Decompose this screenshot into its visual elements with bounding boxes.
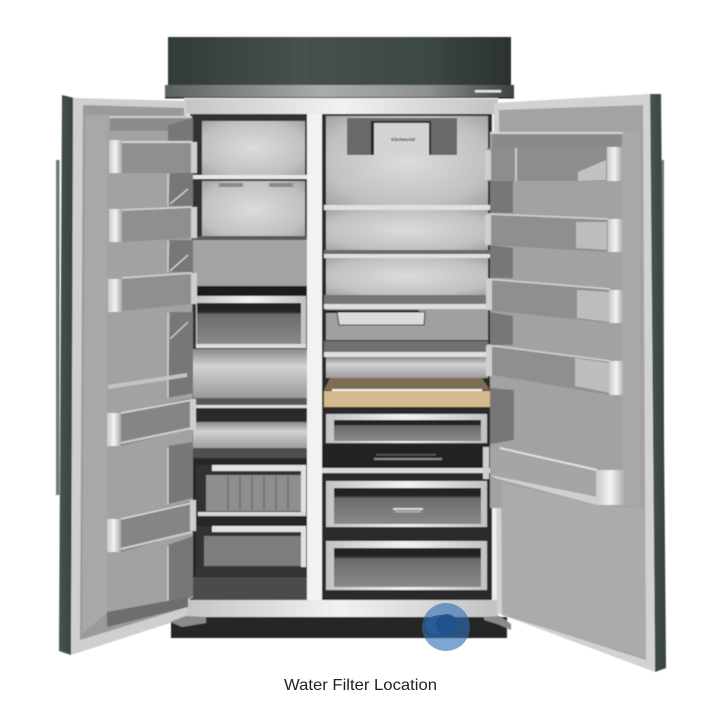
door brackets <box>490 181 514 444</box>
shelf four <box>324 341 488 357</box>
door bottom tray <box>107 597 188 627</box>
door bin one <box>109 140 197 173</box>
wood cutting drawer <box>324 378 490 407</box>
door gasket strip <box>56 160 60 495</box>
door inner wall <box>490 133 623 508</box>
door gasket strip <box>661 160 664 506</box>
rear wall top <box>326 116 488 205</box>
middle open section <box>193 349 307 398</box>
door side liner <box>82 115 110 634</box>
door inner recess <box>80 105 184 640</box>
right door <box>483 94 666 672</box>
refrigerator compartment <box>190 114 307 600</box>
refrigerator <box>56 37 666 672</box>
mid wire shelf <box>193 398 307 422</box>
door top tray <box>492 134 622 148</box>
lower door panel <box>502 483 646 658</box>
water filter location marker <box>422 603 470 651</box>
door bin three <box>108 273 197 312</box>
shelf two <box>324 250 490 258</box>
freezer basket two <box>196 526 306 576</box>
toe kick grille <box>171 617 507 638</box>
upper drawer <box>196 296 306 348</box>
door brackets <box>168 118 193 606</box>
door side liner <box>623 132 640 508</box>
hanging tray <box>326 310 425 325</box>
caption: Water Filter Location <box>284 677 437 694</box>
door bin four <box>486 345 624 395</box>
drawer three <box>326 541 487 590</box>
cabinet frame <box>184 98 498 617</box>
wall five <box>326 357 488 378</box>
door outer edge <box>59 95 74 655</box>
compartment floor <box>193 577 307 600</box>
shelf three <box>324 295 488 309</box>
door recess <box>499 105 646 660</box>
door rail <box>108 373 187 389</box>
door bin five <box>107 500 196 552</box>
freezer basket one <box>196 465 306 516</box>
door bin two <box>485 214 623 252</box>
second section <box>202 181 305 238</box>
freezer compartment <box>322 114 492 600</box>
door bin four <box>107 398 196 446</box>
upper section <box>202 121 305 175</box>
door hinge <box>170 616 206 627</box>
door bin five <box>483 445 625 505</box>
freezer wire shelf <box>193 448 307 458</box>
door top tray <box>110 118 192 131</box>
left door <box>56 95 206 655</box>
door frame <box>494 94 655 672</box>
wire shelf <box>193 236 307 240</box>
drawer two <box>326 481 487 527</box>
door bin two <box>109 207 197 242</box>
ice unit: KitchenAid <box>391 137 415 142</box>
wall four <box>326 309 488 340</box>
dark recess <box>193 286 307 296</box>
control panel <box>322 445 490 473</box>
lower open section <box>193 422 307 449</box>
door bin one <box>485 147 622 181</box>
shelf one <box>324 205 490 210</box>
control header band <box>165 85 514 98</box>
door inner wall <box>107 116 193 627</box>
door hinge <box>484 616 511 630</box>
drawer one <box>326 414 487 443</box>
wall two <box>326 210 488 250</box>
door frame <box>71 98 187 655</box>
glass shelf one <box>193 175 307 180</box>
ice unit <box>347 118 457 155</box>
door bin three <box>486 279 623 323</box>
door outer edge <box>650 94 666 672</box>
solid panel <box>193 240 307 286</box>
wall three <box>326 258 488 295</box>
top cap panel <box>168 37 511 86</box>
bracket highlights <box>168 174 188 606</box>
